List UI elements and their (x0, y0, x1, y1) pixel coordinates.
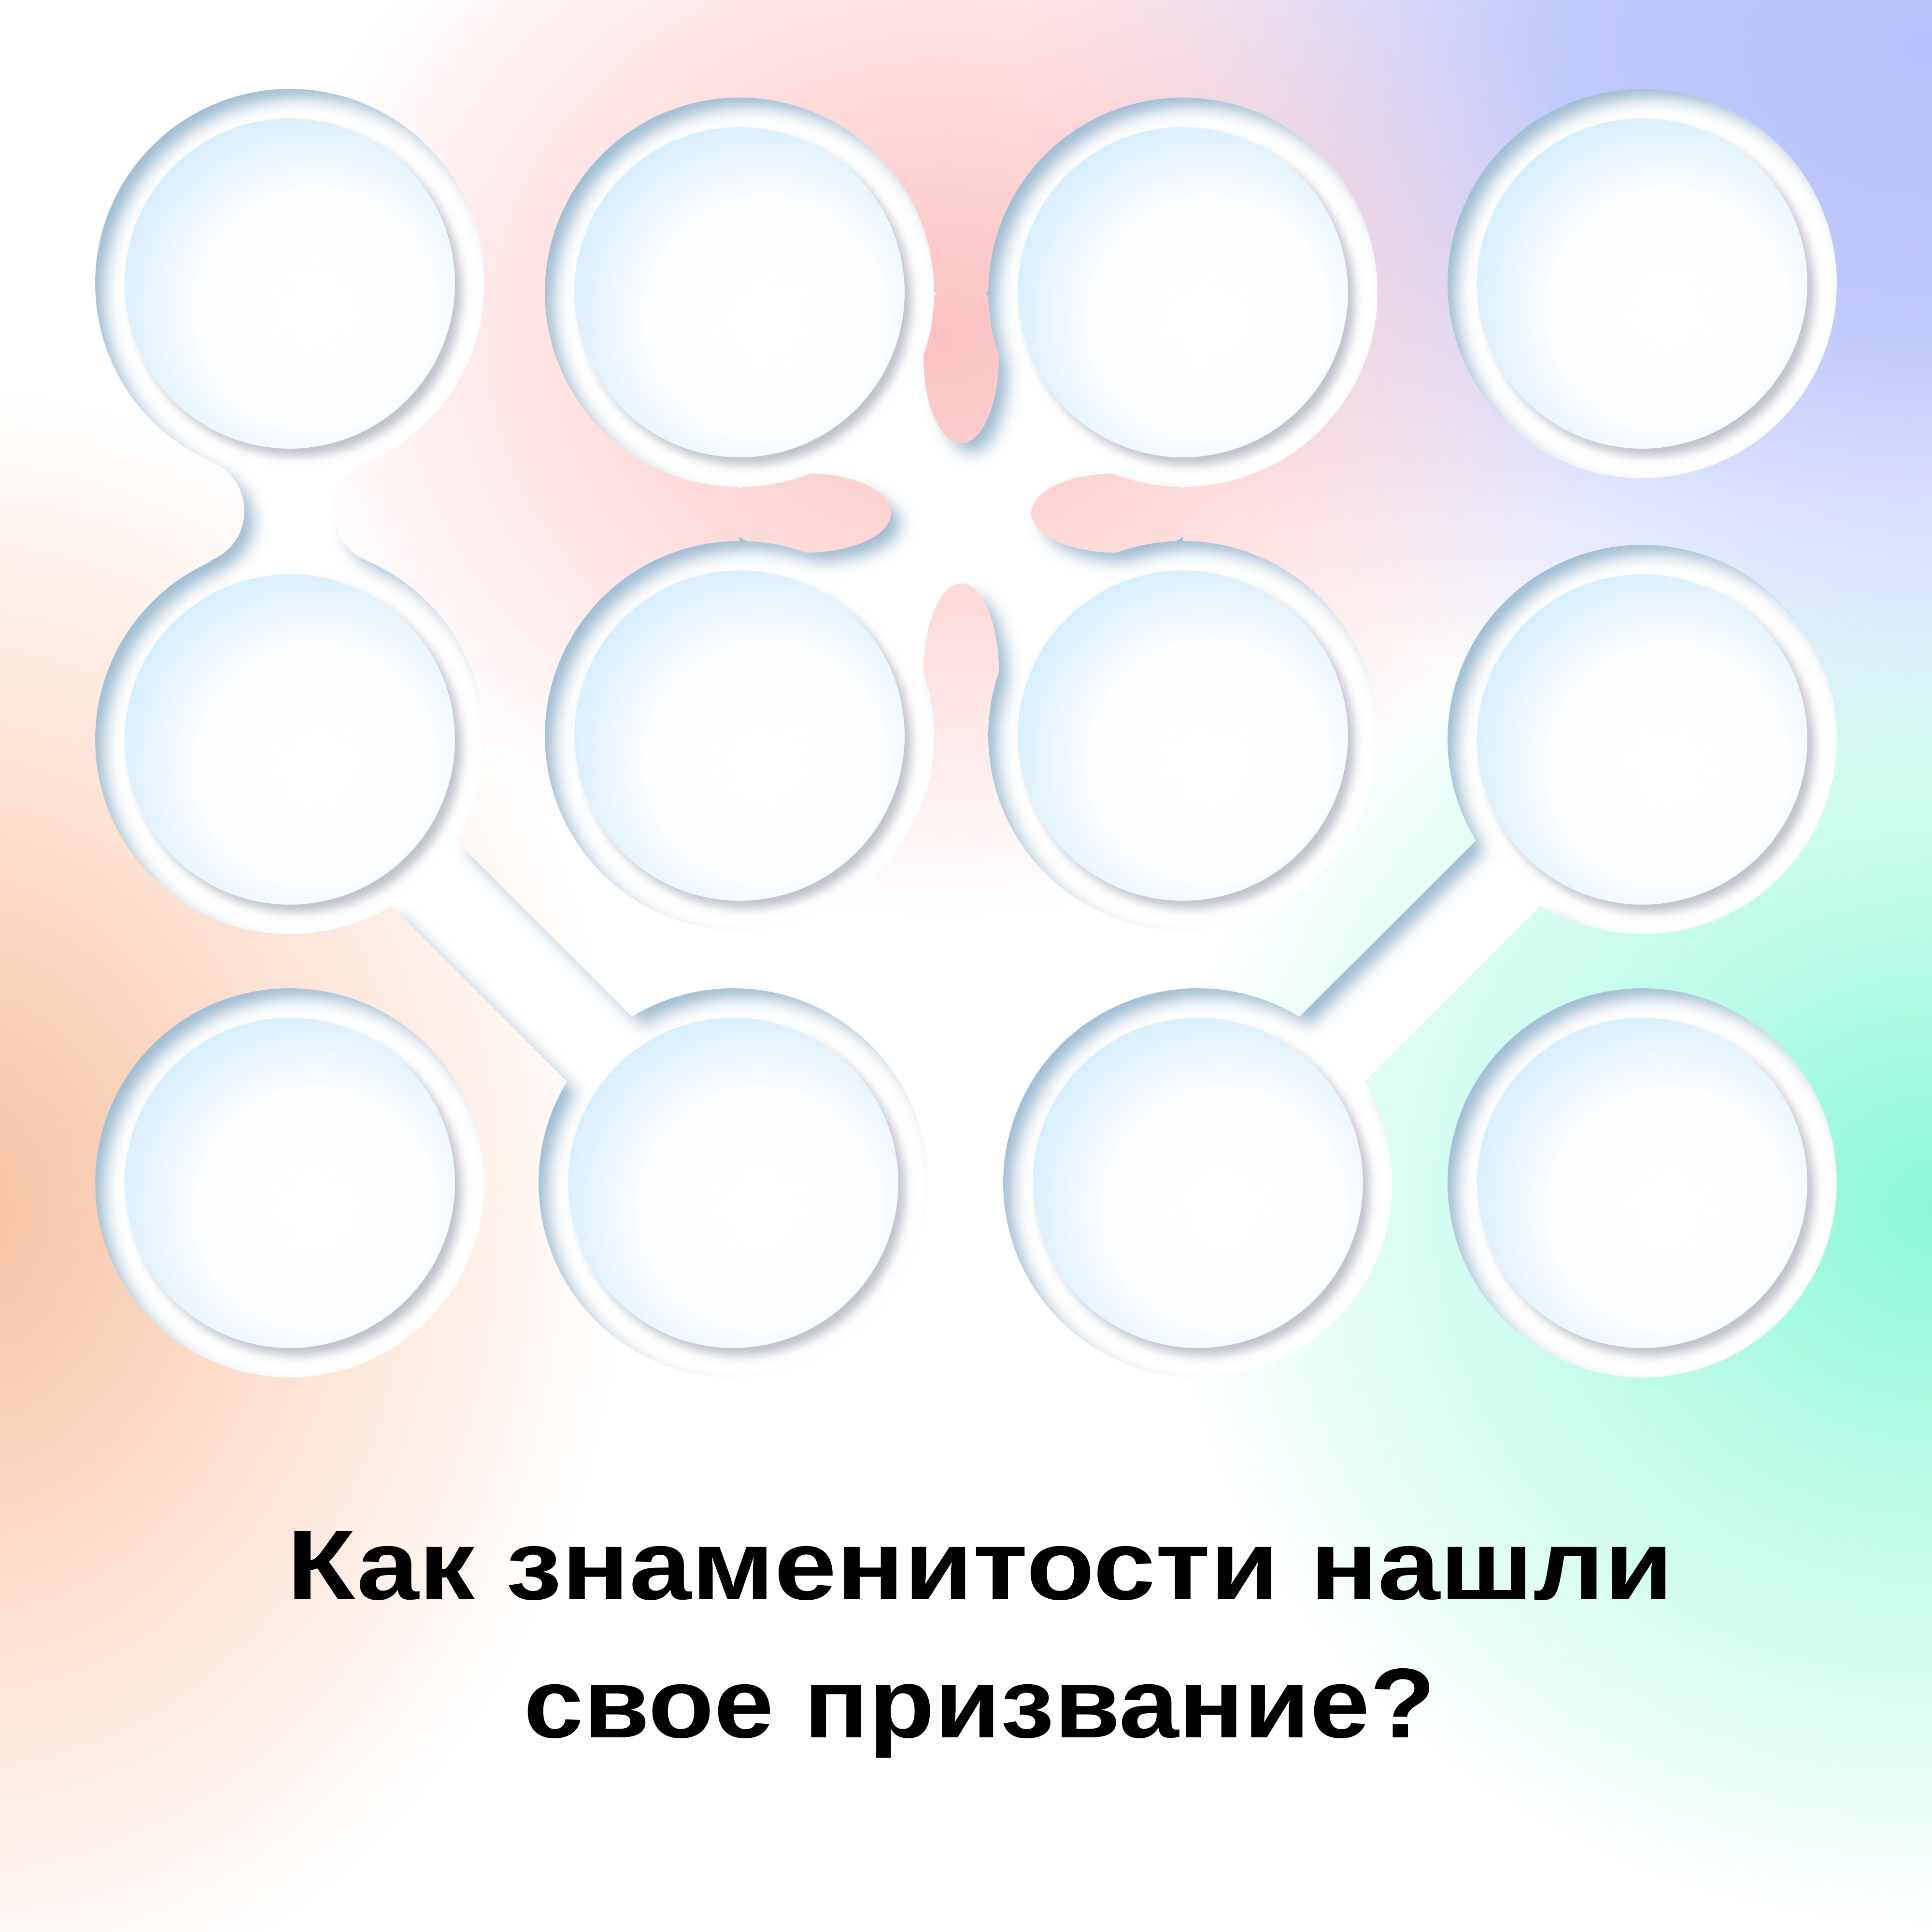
title: свое призвание? (524, 1648, 1435, 1759)
title: Как знаменитости нашли (287, 1510, 1673, 1620)
inner discs (125, 118, 1807, 1348)
white connected shape (95, 89, 1837, 1378)
diagram: connected circles (95, 89, 1837, 1378)
